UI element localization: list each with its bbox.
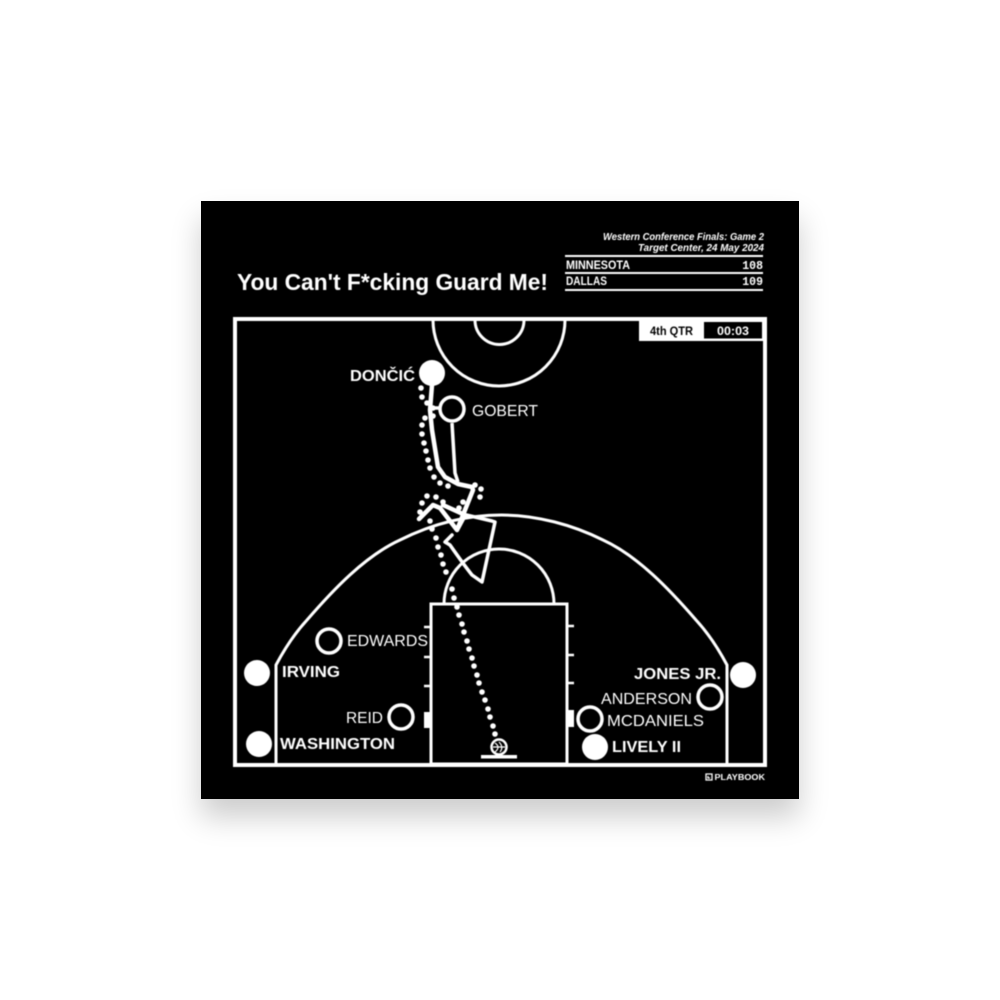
player: Doncic: DONČIĆ bbox=[350, 366, 415, 385]
player path: Doncic bbox=[419, 385, 473, 530]
game info bbox=[603, 232, 764, 254]
player: Anderson: ANDERSON bbox=[601, 691, 692, 708]
player: Anderson bbox=[601, 685, 722, 709]
player: Gobert: GOBERT bbox=[472, 403, 538, 420]
lane blocks bbox=[424, 710, 574, 728]
player: Reid: REID bbox=[346, 710, 383, 727]
logo: Playbook: PLAYBOOK bbox=[714, 773, 765, 782]
player: Irving: IRVING bbox=[282, 664, 340, 681]
player: McDaniels: MCDANIELS bbox=[607, 713, 704, 730]
player: Irving bbox=[244, 660, 340, 686]
player: Lively II: LIVELY II bbox=[612, 739, 681, 756]
score table: MINNESOTA bbox=[566, 260, 630, 272]
clock panel: 4th QTR bbox=[650, 324, 693, 338]
player: McDaniels bbox=[578, 707, 704, 731]
player: Washington: WASHINGTON bbox=[280, 736, 395, 753]
clock panel bbox=[639, 320, 766, 341]
player: Lively II bbox=[582, 734, 681, 760]
ball path bbox=[417, 385, 498, 737]
player: Jones Jr.: JONES JR. bbox=[634, 666, 721, 683]
player: Edwards: EDWARDS bbox=[347, 633, 428, 650]
court lines bbox=[235, 319, 765, 765]
defender path: second bbox=[445, 514, 495, 582]
icon: basketball bbox=[492, 740, 506, 754]
player: Jones Jr. bbox=[634, 662, 756, 688]
player: Gobert bbox=[440, 397, 538, 421]
title: You Can't F*cking Guard Me! bbox=[237, 269, 548, 295]
score table: DALLAS bbox=[566, 276, 607, 288]
clock panel: 00:03 bbox=[717, 324, 749, 338]
player: Edwards bbox=[317, 629, 428, 653]
defender path: Gobert bbox=[433, 408, 458, 482]
backboard bbox=[481, 755, 517, 758]
game info: Western Conference Finals: Game 2 bbox=[603, 232, 764, 243]
score table bbox=[565, 255, 763, 291]
score table: 109 bbox=[742, 276, 763, 289]
game info: Target Center, 24 May 2024 bbox=[638, 243, 764, 254]
score table: 108 bbox=[742, 260, 763, 273]
player: Doncic bbox=[350, 360, 445, 386]
player: Reid bbox=[346, 705, 413, 729]
poster bbox=[201, 201, 799, 799]
player: Washington bbox=[246, 731, 395, 757]
